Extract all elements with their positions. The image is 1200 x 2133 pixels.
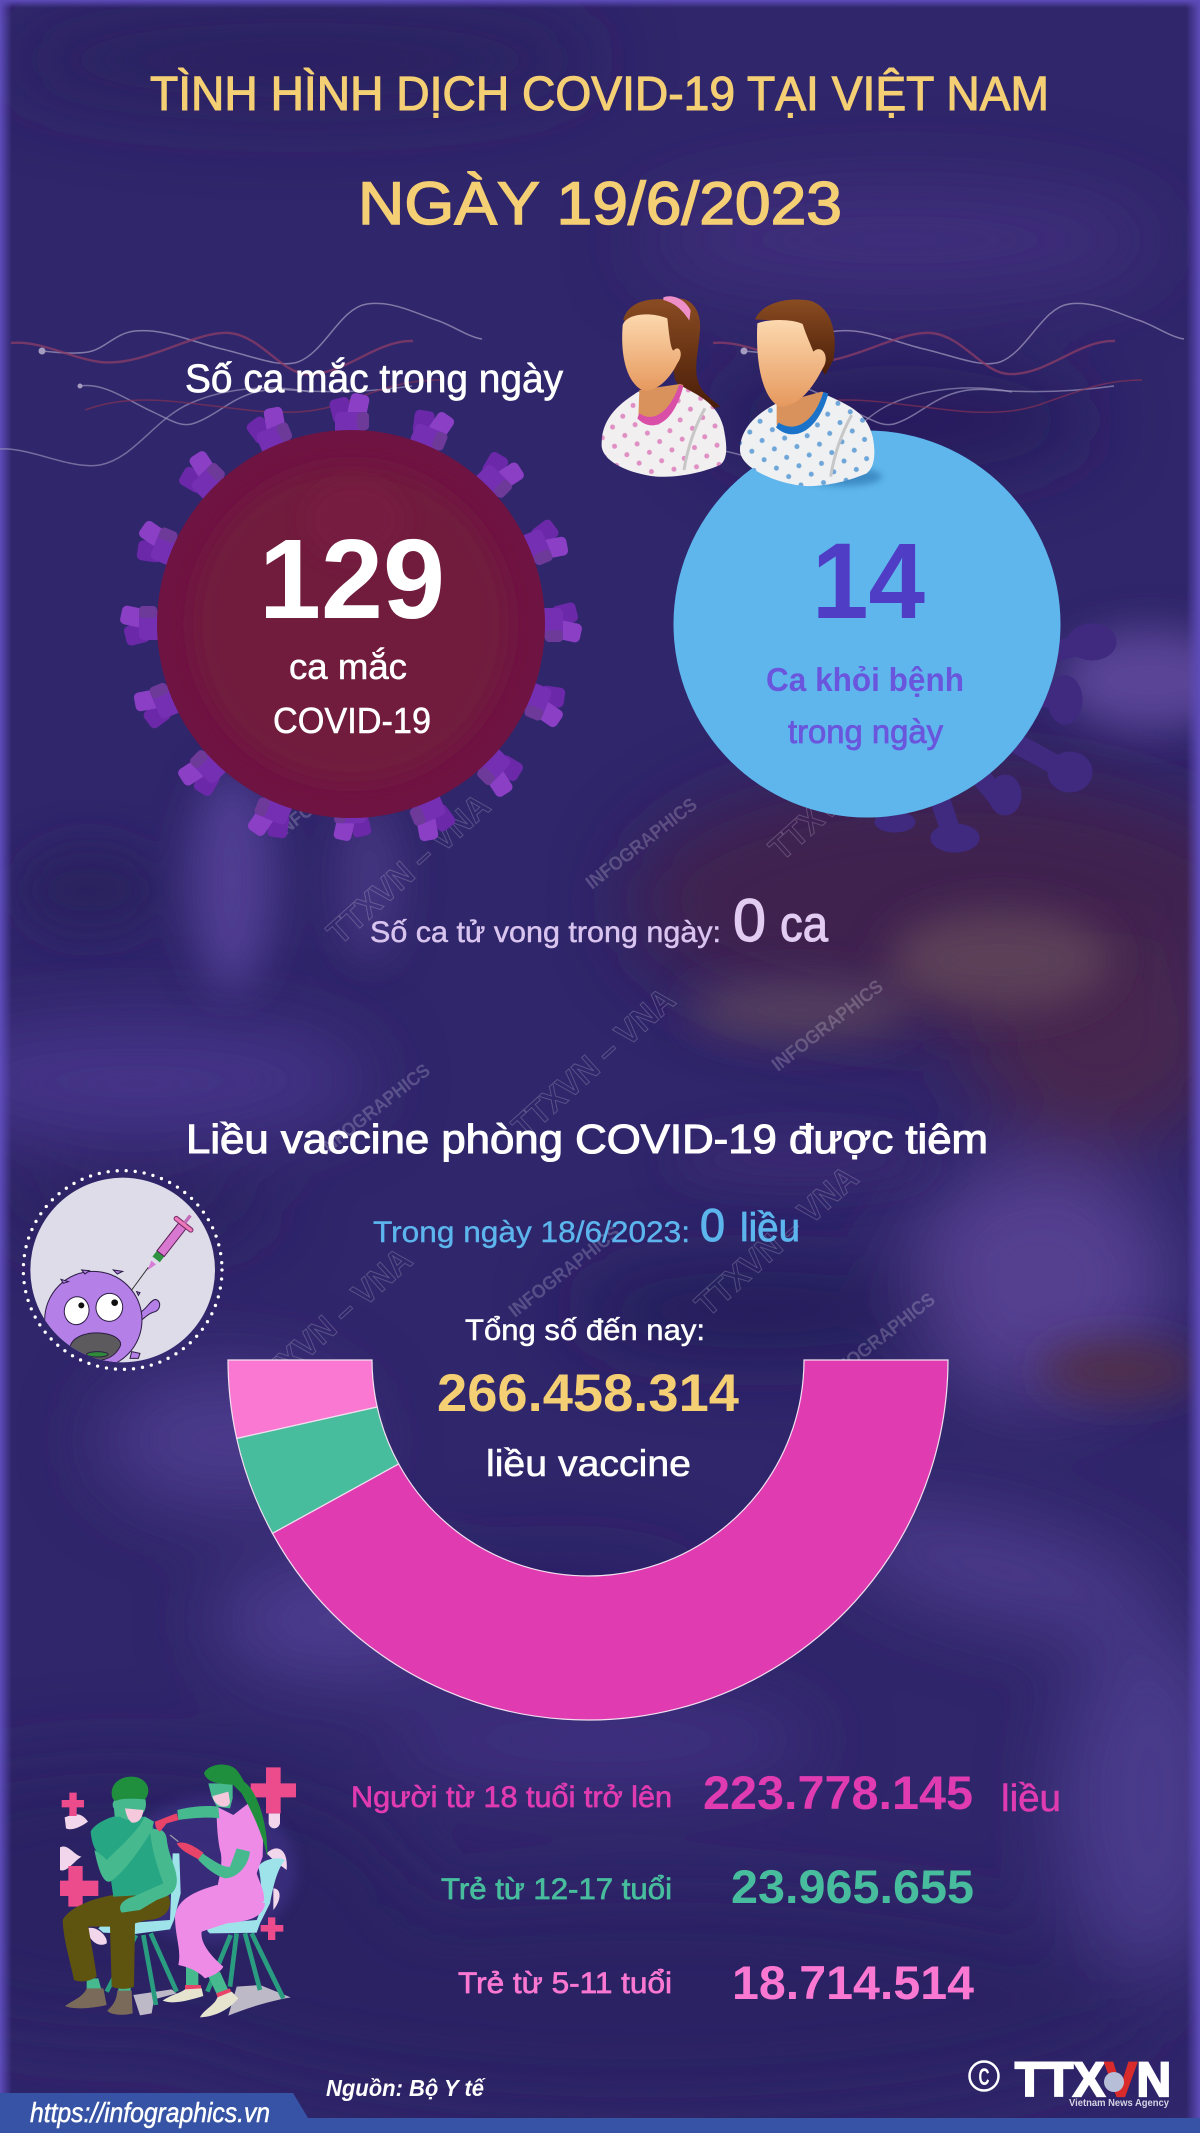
legend row: adults: 223.778.145 (703, 1766, 973, 1819)
text: vaccine doses: liều vaccine (486, 1443, 691, 1484)
watermarks: INFOGRAPHICS (315, 1060, 434, 1160)
title line 2: date: NGÀY 19/6/2023 (358, 170, 842, 237)
left chair (98, 1853, 181, 2005)
decorative wave lines right (702, 303, 1184, 466)
watermarks: TTXVN – VNA (762, 703, 940, 868)
text: in a day: trong ngày (788, 713, 943, 750)
legend row: adults: liều (1001, 1778, 1061, 1820)
text: deaths in a day: Số ca tử vong trong ngày: (370, 916, 721, 949)
icon: female patient (602, 296, 726, 477)
watermarks: INFOGRAPHICS (505, 1222, 624, 1322)
patient man (63, 1777, 177, 2015)
watermarks (242, 703, 940, 1406)
text: ca: ca (780, 896, 828, 952)
number: 129: 129 (259, 516, 445, 642)
legend row: children 5-11 (458, 1956, 974, 2009)
background virus behind the blue circle (875, 624, 1116, 852)
watermarks: INFOGRAPHICS (820, 1289, 939, 1389)
text: COVID-19: COVID-19 (273, 700, 431, 741)
source note: Nguồn: Bộ Y tế (326, 2075, 486, 2101)
right chair (207, 1858, 285, 1998)
icon: virus spikes (119, 392, 583, 847)
text: recovered cases: Ca khỏi bệnh (766, 661, 964, 698)
logo: TTXVN: TTXVN (1015, 2054, 1171, 2107)
legend row: children 5-11: 18.714.514 (732, 1956, 974, 2009)
heading: vaccine doses: Liều vaccine phòng COVID-19 được tiêm (186, 1116, 988, 1162)
legend row: children 12-17: Trẻ từ 12-17 tuổi (441, 1873, 672, 1906)
text: total so far: Tổng số đến nay: (465, 1314, 705, 1347)
legend row: children 12-17 (441, 1860, 974, 1913)
segment: children 12-17 (237, 1407, 399, 1533)
nurse (155, 1764, 267, 2017)
watermarks: INFOGRAPHICS (582, 794, 701, 894)
number: 0 doses: 0 (700, 1199, 725, 1251)
legend row: children 5-11: Trẻ từ 5-11 tuổi (458, 1967, 672, 2000)
illustration: vaccination scene (60, 1764, 297, 2017)
text: ca mac: ca mắc (289, 646, 407, 687)
footer bar (0, 2118, 1200, 2133)
number: total doses: 266.458.314 (437, 1364, 740, 1423)
decorative wave lines left (0, 303, 482, 466)
segment: children 5-11 (228, 1360, 377, 1438)
watermarks: INFOGRAPHICS (768, 976, 887, 1076)
number: 0 deaths: 0 (733, 887, 766, 954)
text: doses: liều (740, 1206, 800, 1250)
text: doses on 18/6/2023: Trong ngày 18/6/2023: (373, 1216, 690, 1249)
number: 14: 14 (812, 520, 925, 641)
semicircle donut chart (228, 1360, 948, 1720)
title line 1: TÌNH HÌNH DỊCH COVID-19 TẠI VIỆT NAM (150, 68, 1049, 121)
legend row: adults (351, 1766, 1061, 1820)
watermarks: TTXVN – VNA (688, 1159, 866, 1324)
footer tab with url (0, 2093, 308, 2133)
watermarks: INFOGRAPHICS (272, 742, 391, 842)
logo: copyright mark: C (978, 2064, 990, 2091)
watermarks: TTXVN – VNA (505, 981, 683, 1146)
legend row: children 12-17: 23.965.655 (731, 1860, 974, 1913)
red virus circle panel: new cases (119, 392, 583, 847)
legend row: adults: Người từ 18 tuổi trở lên (351, 1781, 672, 1814)
label: cases per day: Số ca mắc trong ngày (185, 356, 563, 401)
segment: adults (272, 1360, 948, 1720)
watermarks: TTXVN – VNA (320, 787, 498, 952)
blue circle panel: recovered (674, 430, 1060, 818)
icon: virus getting vaccinated (23, 1171, 222, 1369)
logo: TTXVN: Vietnam News Agency (1069, 2097, 1169, 2109)
icon: male patient (740, 300, 882, 486)
watermarks: TTXVN – VNA (242, 1241, 420, 1406)
logo: copyright mark (970, 2062, 998, 2091)
footer tab with url: https://infographics.vn (30, 2097, 270, 2128)
